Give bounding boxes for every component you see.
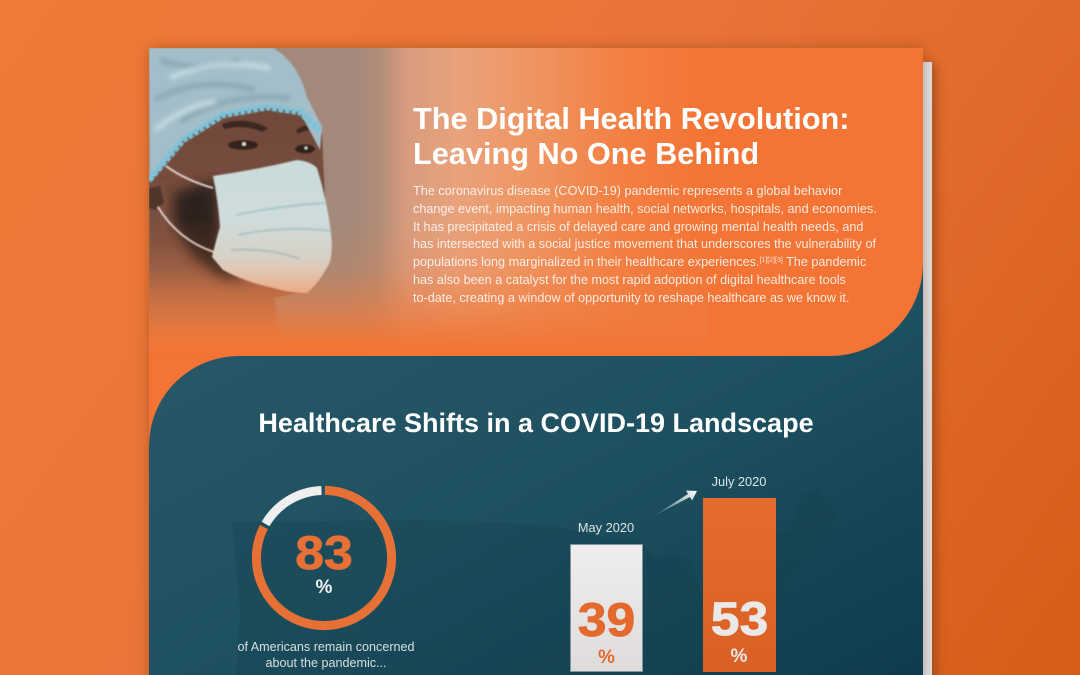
bar: July 2020 [702, 498, 776, 672]
donut caption: of Americans remain concerned [237, 640, 415, 654]
label: May 2020: May 2020 [578, 520, 634, 535]
intro paragraph: populations long marginalized in their healthcare experiences.[1][2][3] The pandemic [413, 255, 866, 269]
donut chart: 83 percent [252, 486, 396, 630]
back page sheet [300, 62, 932, 675]
intro paragraph [413, 184, 877, 304]
bar value 53: 53 [710, 592, 768, 645]
title: Leaving No One Behind [413, 136, 759, 171]
mask [212, 160, 332, 293]
intro paragraph: has intersected with a social justice movement that underscores the vulnerability of [413, 237, 876, 251]
beard [174, 180, 250, 280]
title: The Digital Health Revolution: [413, 101, 849, 136]
donut caption [237, 640, 415, 670]
front page [149, 48, 923, 675]
map: faint USA silhouette [232, 487, 838, 675]
donut percent sign: % [316, 577, 332, 598]
bar value 39: 39 [578, 593, 635, 646]
photo: masked clinician [149, 48, 683, 340]
label: July 2020: July 2020 [712, 474, 766, 489]
head and neck [149, 108, 325, 356]
intro paragraph: The coronavirus disease (COVID-19) pandemic represents a global behavior [413, 184, 842, 198]
cap [149, 48, 322, 182]
donut caption: about the pandemic... [265, 656, 387, 670]
brows and eyes [222, 121, 268, 132]
ear [149, 186, 164, 210]
panel: teal section [149, 264, 923, 675]
bar percent 39: % [598, 647, 615, 668]
bar percent 53: % [731, 646, 747, 667]
title [413, 101, 849, 171]
intro paragraph: to-date, creating a window of opportunity to reshape healthcare as we know it. [413, 290, 849, 304]
arrow: rising trend [655, 490, 697, 516]
donut value: 83 [295, 526, 353, 579]
intro paragraph: It has precipitated a crisis of delayed care and growing mental health needs, and [413, 220, 863, 234]
intro paragraph: change event, impacting human health, social networks, hospitals, and economies. [413, 202, 877, 216]
bar: May 2020 [570, 544, 643, 672]
mask ear loops [158, 166, 214, 252]
section heading: Healthcare Shifts in a COVID-19 Landscape [258, 408, 814, 438]
intro paragraph: has also been a catalyst for the most rapid adoption of digital healthcare tools [413, 273, 846, 287]
